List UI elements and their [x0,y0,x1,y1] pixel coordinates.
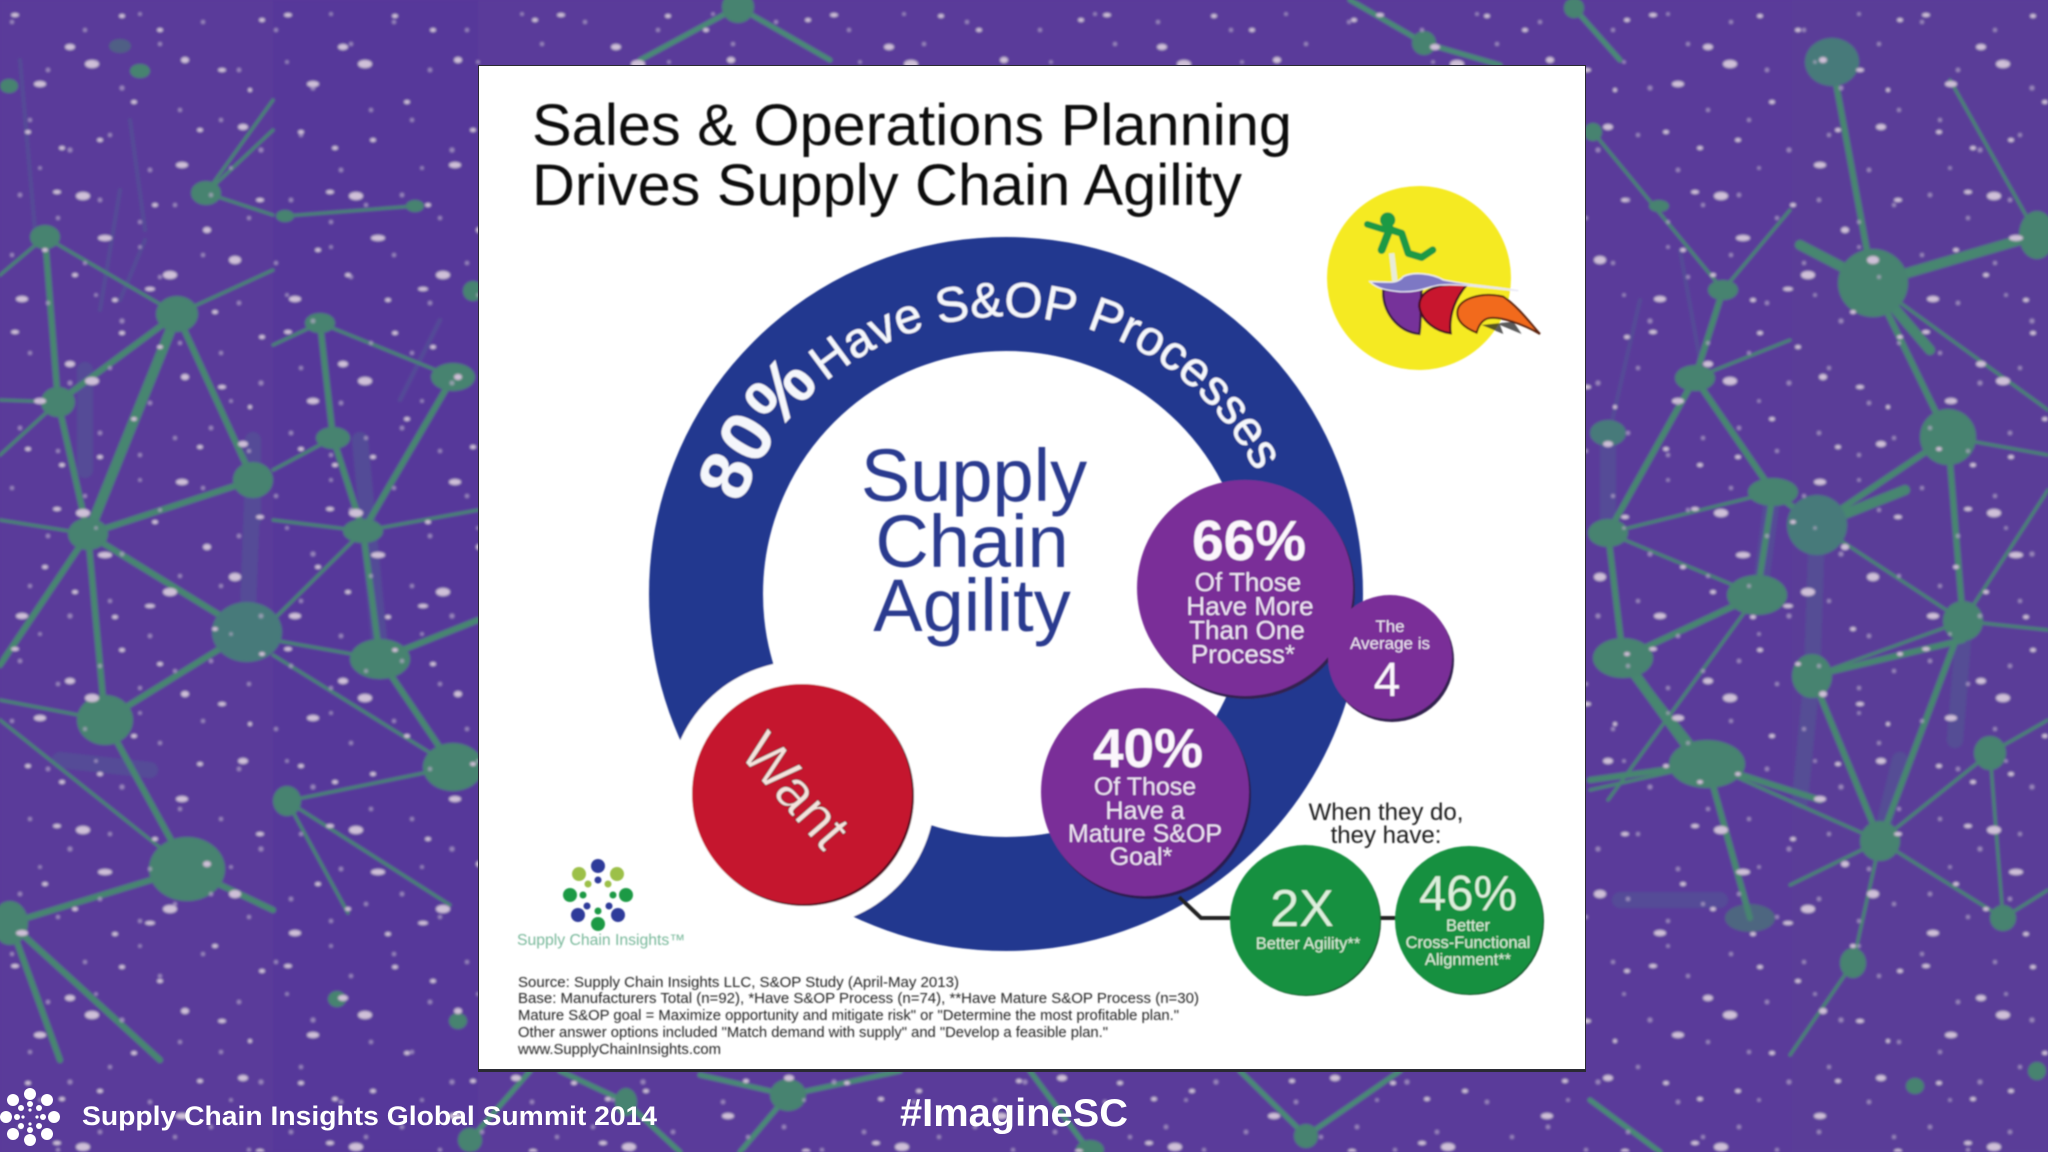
connector line to green circles [1179,897,1396,918]
source notes: www.SupplyChainInsights.com [517,1042,721,1058]
circle: the average is 4: The [1375,617,1405,636]
circle: 2X better agility: 2X [1270,880,1334,938]
ring: 80% have S&OP processes [648,236,1346,952]
center heading: Supply Chain Agility: Agility [873,564,1071,647]
callout: when they do, they have: When they do, [1309,799,1463,826]
center heading: Supply Chain Agility: Chain [875,500,1069,583]
footer text: summit name: Supply Chain Insights Global Summit 2014 [82,1101,657,1131]
circle: the average is 4: 4 [1374,654,1400,707]
circle: 66% of those have more than one process: Process* [1191,639,1295,669]
circle: 46% better cross-functional alignment: Alignment** [1425,951,1512,969]
circle: 46% better cross-functional alignment [1395,846,1544,995]
circle: Want [692,684,914,906]
circle: 66% of those have more than one process: Have More [1186,591,1314,621]
title: Drives Supply Chain Agility [532,153,1242,218]
footer logo: white dots [0,1088,60,1146]
source notes: Other answer options included "Match demand with supply" and "Develop a feasible plan." [518,1025,1108,1041]
logo: Supply Chain Insights: Supply Chain Insights™ [517,932,685,949]
circle: 46% better cross-functional alignment: 46% [1419,867,1517,921]
source notes: Base: Manufacturers Total (n=92), *Have S&OP Process (n=74), **Have Mature S&OP Process (n=30) [518,991,1199,1007]
icon: surfer on wave in yellow circle [1327,186,1540,370]
panel: white infographic card [478,65,1586,1072]
title [532,93,1292,218]
circle: 2X better agility [1230,845,1381,996]
circle: 40% of those have a mature S&OP goal: 40% [1093,717,1203,779]
circle: Want: Want [728,720,862,861]
circle: 66% of those have more than one process: Than One [1189,615,1305,645]
callout: when they do, they have [1309,799,1463,849]
circle: 40% of those have a mature S&OP goal [1041,688,1251,899]
circle: 40% of those have a mature S&OP goal: Of Those [1094,773,1196,801]
source notes: Source: Supply Chain Insights LLC, S&OP Study (April-May 2013) [518,975,959,991]
callout: when they do, they have: they have: [1331,822,1441,849]
title: Sales & Operations Planning [532,93,1292,158]
ring: 80% have S&OP processes: 80% Have S&OP Processes [699,281,1277,500]
logo: Supply Chain Insights [517,859,685,949]
footer text: hashtag: #ImagineSC [900,1092,1128,1135]
circle: the average is 4 [1328,595,1454,722]
circle: 46% better cross-functional alignment: Better [1446,917,1491,935]
source notes: Mature S&OP goal = Maximize opportunity and mitigate risk" or "Determine the most profitable plan." [518,1008,1179,1024]
circle: 66% of those have more than one process [1137,480,1355,699]
source notes [517,975,1199,1058]
center heading: Supply Chain Agility [861,434,1087,647]
circle: 40% of those have a mature S&OP goal: Have a [1105,797,1185,825]
center heading: Supply Chain Agility: Supply [861,434,1087,517]
circle: 2X better agility: Better Agility** [1256,935,1361,953]
circle: 66% of those have more than one process: Of Those [1195,567,1301,597]
circle: 40% of those have a mature S&OP goal: Goal* [1110,843,1173,871]
circle: the average is 4: Average is [1350,634,1430,653]
circle: 40% of those have a mature S&OP goal: Mature S&OP [1068,820,1222,848]
circle: 46% better cross-functional alignment: Cross-Functional [1406,934,1530,952]
circle: 66% of those have more than one process: 66% [1192,509,1306,573]
